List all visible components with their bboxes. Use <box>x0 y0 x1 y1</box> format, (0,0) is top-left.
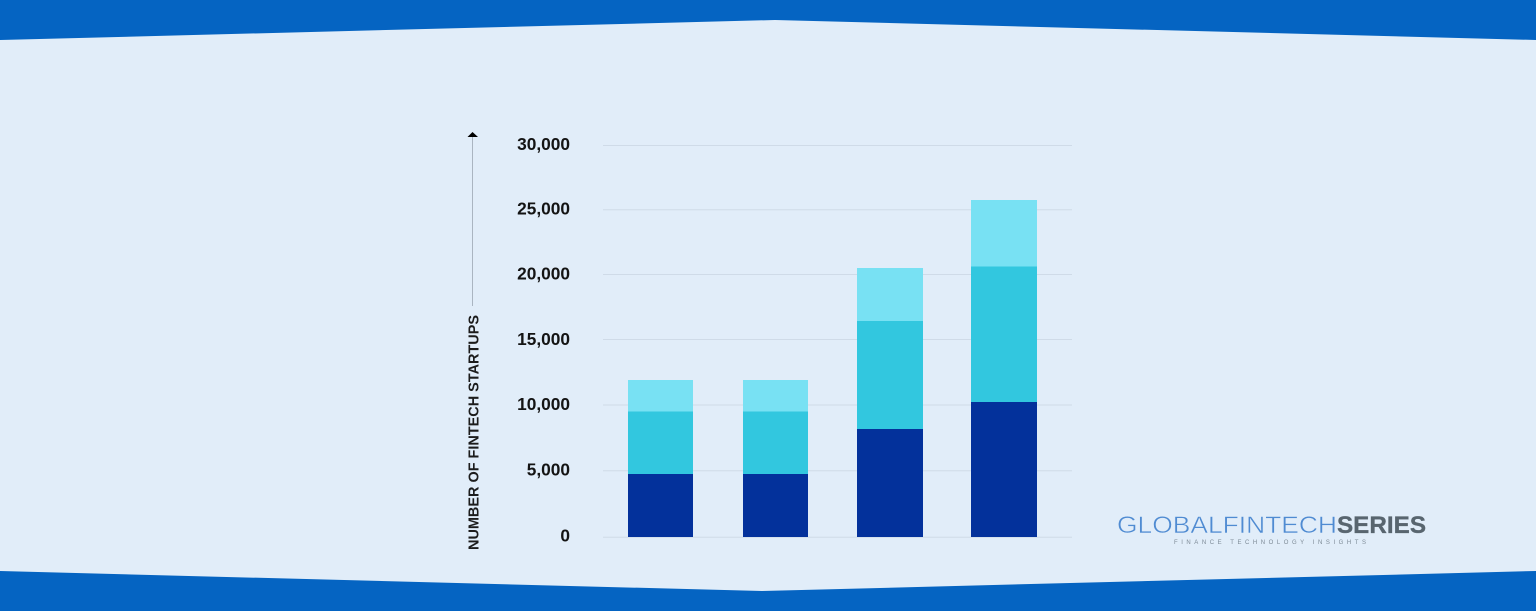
y axis labels: 15,000 <box>517 329 570 349</box>
bar 2 <box>743 380 808 537</box>
logo: Global Fintech Series <box>1117 512 1426 546</box>
y axis labels: 10,000 <box>517 394 570 414</box>
y axis title: NUMBER OF FINTECH STARTUPS <box>466 315 482 550</box>
logo: Global Fintech Series: GLOBALFINTECH <box>1117 512 1337 539</box>
stacked bar chart <box>517 134 1072 546</box>
logo: Global Fintech Series: SERIES <box>1337 512 1426 539</box>
y axis labels: 20,000 <box>517 264 570 284</box>
bar 4 <box>971 200 1037 537</box>
y axis labels: 25,000 <box>517 198 570 218</box>
bar 3 <box>857 268 923 537</box>
logo: Global Fintech Series: FINANCE TECHNOLOGY INSIGHTS <box>1174 540 1366 546</box>
bar 1 <box>628 380 693 537</box>
top banner <box>0 0 1536 40</box>
y axis labels <box>517 134 570 546</box>
y axis labels: 5,000 <box>527 460 570 480</box>
arrow: y axis <box>468 132 478 306</box>
y axis labels: 30,000 <box>517 134 570 154</box>
bottom banner <box>0 571 1536 611</box>
y axis labels: 0 <box>560 526 570 546</box>
